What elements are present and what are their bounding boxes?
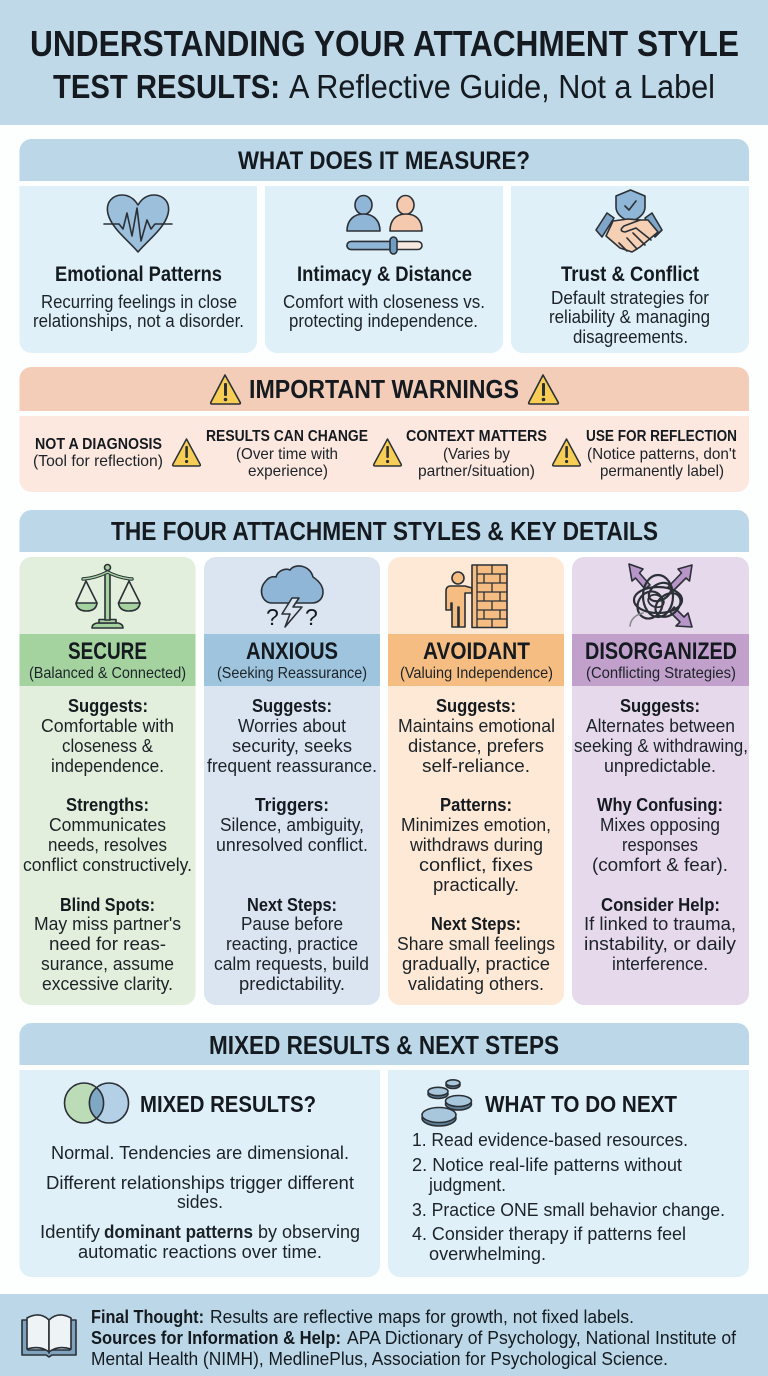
text block: anxious next steps: Pause before [241, 914, 343, 934]
icon: shield and handshake [596, 190, 662, 252]
text block: avoidant patterns: Minimizes emotion, [401, 815, 551, 835]
icon: two people with slider [347, 196, 422, 254]
text block: mixed results explanation [40, 1143, 360, 1262]
warning: context matters: CONTEXT MATTERS [406, 428, 547, 445]
text block: anxious next steps: reacting, practice [226, 934, 358, 954]
text block: anxious triggers: Triggers: [255, 795, 329, 815]
panel: anxious [204, 557, 380, 1005]
icon: open book [22, 1315, 76, 1357]
heading: what does it measure: WHAT DOES IT MEASURE? [238, 147, 530, 175]
numbered list: next steps: 4. Consider therapy if patterns feel [412, 1224, 686, 1244]
icon: venn diagram [64, 1083, 128, 1123]
text block: anxious suggests: security, seeks [232, 736, 352, 756]
text block: avoidant patterns [401, 795, 551, 895]
text block: secure strengths: Communicates [49, 815, 166, 835]
heading: the four attachment styles [20, 510, 749, 552]
text block: secure strengths: conflict constructively. [23, 855, 192, 875]
panel: intimacy and distance: Intimacy & Distance [297, 263, 472, 286]
warning: results can change: (Over time with [236, 446, 338, 463]
text block: secure suggests: independence. [51, 756, 164, 776]
numbered list: next steps: judgment. [428, 1175, 506, 1195]
band: secure: SECURE [68, 638, 147, 665]
text block: secure blind spots: May miss partner's [34, 914, 181, 934]
heading: what does it measure [20, 139, 749, 181]
warning: not a diagnosis: (Tool for reflection) [33, 453, 163, 470]
text block: disorganized why confusing: Mixes opposing [600, 815, 720, 835]
icon: warning triangle right [529, 375, 558, 404]
icon: warning triangle 2 [374, 439, 401, 466]
numbered list: next steps: 2. Notice real-life patterns without [412, 1155, 682, 1175]
text block: anxious suggests [207, 696, 377, 776]
warning: use for reflection: (Notice patterns, don't [587, 446, 737, 463]
warning: not a diagnosis: NOT A DIAGNOSIS [35, 436, 162, 453]
icon: heart with pulse [104, 195, 172, 252]
text block: final thought: Sources for Information & Help: [91, 1328, 341, 1348]
title banner [0, 0, 768, 125]
text block: avoidant suggests: Maintains emotional [398, 716, 555, 736]
text block: avoidant suggests: Suggests: [436, 696, 516, 716]
band: avoidant [388, 634, 564, 686]
heading: mixed results and next steps: MIXED RESULTS & NEXT STEPS [209, 1030, 559, 1060]
icon: warning triangle left [211, 375, 240, 404]
panel: mixed results: MIXED RESULTS? [140, 1091, 316, 1117]
band: anxious: ANXIOUS [246, 638, 338, 665]
text block: secure strengths [23, 795, 192, 875]
text block: anxious next steps: Next Steps: [247, 895, 337, 915]
text block: secure suggests: Suggests: [68, 696, 148, 716]
panel: trust and conflict: Trust & Conflict [561, 263, 699, 286]
text block: avoidant next steps: validating others. [408, 974, 544, 994]
icon label: question marks [266, 604, 318, 630]
text block: secure suggests: closeness & [62, 736, 153, 756]
text block: avoidant patterns: practically. [433, 875, 519, 895]
panel: avoidant [388, 557, 564, 1005]
warning: use for reflection: USE FOR REFLECTION [586, 428, 737, 445]
text block: disorganized suggests: Alternates between [586, 716, 735, 736]
band: secure [20, 634, 196, 686]
text block: avoidant next steps: gradually, practice [402, 954, 550, 974]
text block: final thought: APA Dictionary of Psychology, National Institute of [347, 1328, 737, 1348]
text block: secure blind spots [34, 895, 181, 994]
heading: mixed results and next steps [20, 1023, 749, 1065]
footer: final thought and sources [0, 1294, 768, 1376]
icon: tangled knot with arrows [629, 564, 692, 627]
text block: disorganized why confusing: Why Confusing: [597, 795, 723, 815]
panel: warnings list [20, 416, 749, 492]
numbered list: next steps: overwhelming. [429, 1244, 546, 1264]
text block: anxious suggests: Worries about [238, 716, 346, 736]
text block: anxious suggests: Suggests: [252, 696, 332, 716]
text block: avoidant next steps [397, 914, 555, 994]
numbered list: next steps: 3. Practice ONE small behavior change. [412, 1200, 725, 1220]
panel: intimacy and distance [265, 186, 503, 353]
warning: results can change: experience) [248, 463, 328, 480]
section: what does it measure [20, 139, 749, 353]
text block: disorganized why confusing: responses [622, 835, 698, 855]
title banner: TEST RESULTS: [53, 68, 280, 105]
text block: avoidant patterns: withdraws during [409, 835, 543, 855]
title banner: A Reflective Guide, Not a Label [289, 68, 715, 105]
text block: disorganized suggests [574, 696, 748, 776]
band: disorganized: (Conflicting Strategies) [586, 665, 736, 682]
panel: intimacy and distance: Comfort with closeness vs. [283, 292, 485, 312]
text block: avoidant suggests: distance, prefers [408, 736, 544, 756]
panel: emotional patterns: relationships, not a disorder. [33, 311, 244, 331]
warning: results can change: RESULTS CAN CHANGE [206, 428, 368, 445]
text block: secure strengths: Strengths: [66, 795, 149, 815]
text block: secure blind spots: surance, assume [41, 954, 174, 974]
text block: secure blind spots: excessive clarity. [42, 974, 173, 994]
panel: trust and conflict: disagreements. [573, 327, 688, 347]
text block: mixed results explanation: by observing [258, 1222, 360, 1242]
warning: not a diagnosis [33, 436, 163, 470]
icon: warning triangle 3 [553, 439, 580, 466]
text block: secure strengths: needs, resolves [48, 835, 167, 855]
text block: disorganized suggests: seeking & withdrawing, [574, 736, 748, 756]
text block: secure blind spots: Blind Spots: [60, 895, 155, 915]
text block: anxious triggers [216, 795, 368, 855]
warning: context matters: partner/situation) [418, 463, 535, 480]
text block: mixed results explanation: sides. [177, 1192, 223, 1212]
band: disorganized [572, 634, 749, 686]
text block: disorganized suggests: unpredictable. [604, 756, 716, 776]
text block: anxious suggests: frequent reassurance. [207, 756, 377, 776]
panel: mixed results [20, 1070, 380, 1277]
panel: trust and conflict [511, 186, 749, 353]
warning: use for reflection: permanently label) [600, 463, 724, 480]
heading: the four attachment styles: THE FOUR ATTACHMENT STYLES & KEY DETAILS [111, 516, 658, 546]
text block: disorganized consider help [584, 895, 736, 974]
panel: trust and conflict: reliability & managing [549, 307, 710, 327]
band: anxious: (Seeking Reassurance) [217, 665, 367, 682]
text block: final thought: Results are reflective maps for growth, not fixed labels. [210, 1307, 634, 1327]
band: avoidant: AVOIDANT [423, 638, 530, 665]
numbered list: next steps [412, 1130, 725, 1264]
text block: avoidant suggests: self-reliance. [422, 756, 530, 776]
text block: avoidant suggests [398, 696, 555, 776]
text block: disorganized why confusing: (comfort & fear). [592, 855, 728, 875]
text block: disorganized consider help: interference. [612, 954, 708, 974]
text block: secure blind spots: need for reas- [49, 934, 166, 954]
text block: mixed results explanation: Identify [40, 1222, 100, 1242]
text block: mixed results explanation: automatic reactions over time. [78, 1242, 322, 1262]
text block: secure suggests: Comfortable with [41, 716, 174, 736]
icon label: question marks: ? [266, 604, 279, 630]
band: avoidant: (Valuing Independence) [400, 665, 553, 682]
section: important warnings [20, 367, 749, 492]
text block: disorganized consider help: instability, or daily [584, 934, 736, 954]
text block: anxious next steps [214, 895, 369, 994]
band: disorganized: DISORGANIZED [585, 638, 737, 665]
text block: disorganized consider help: Consider Help: [601, 895, 720, 915]
text block: anxious next steps: predictability. [239, 974, 345, 994]
text block: avoidant next steps: Share small feelings [397, 934, 555, 954]
panel: secure [20, 557, 196, 1005]
icon label: question marks: ? [305, 604, 318, 630]
text block: disorganized suggests: Suggests: [620, 696, 700, 716]
text block: final thought [91, 1307, 737, 1369]
warning: use for reflection [586, 428, 737, 480]
text block: mixed results explanation: dominant patterns [104, 1222, 253, 1242]
text block: mixed results explanation: Normal. Tendencies are dimensional. [51, 1143, 349, 1163]
band: secure: (Balanced & Connected) [29, 665, 186, 682]
text block: avoidant next steps: Next Steps: [431, 914, 521, 934]
panel: what to do next [388, 1070, 749, 1277]
band: anxious [204, 634, 380, 686]
icon: warning triangle 1 [173, 439, 200, 466]
text block: mixed results explanation: Different relationships trigger different [46, 1173, 354, 1193]
icon: storm cloud [261, 566, 323, 627]
panel: emotional patterns: Emotional Patterns [55, 263, 222, 286]
panel: emotional patterns [20, 186, 257, 353]
panel: trust and conflict: Default strategies for [551, 288, 709, 308]
warning: results can change [206, 428, 368, 480]
numbered list: next steps: 1. Read evidence-based resources. [412, 1130, 688, 1150]
warning: context matters [406, 428, 547, 480]
text block: final thought: Final Thought: [91, 1307, 204, 1327]
heading: important warnings: IMPORTANT WARNINGS [249, 374, 519, 404]
warning: context matters: (Varies by [443, 446, 510, 463]
text block: final thought: Mental Health (NIMH), MedlinePlus, Association for Psychological Science. [91, 1349, 668, 1369]
icon: stepping stones [422, 1080, 472, 1126]
icon: person at brick wall [446, 565, 507, 628]
text block: anxious next steps: calm requests, build [214, 954, 369, 974]
heading: important warnings [20, 367, 749, 411]
panel: emotional patterns: Recurring feelings in close [41, 292, 237, 312]
text block: anxious triggers: unresolved conflict. [216, 835, 368, 855]
panel: intimacy and distance: protecting independence. [289, 311, 478, 331]
text block: disorganized consider help: If linked to trauma, [584, 914, 736, 934]
panel: what to do next: WHAT TO DO NEXT [485, 1091, 677, 1117]
text block: avoidant patterns: conflict, fixes [419, 855, 533, 875]
panel: disorganized [572, 557, 749, 1005]
icon: balance scales [76, 564, 140, 628]
text block: anxious triggers: Silence, ambiguity, [220, 815, 364, 835]
text block: avoidant patterns: Patterns: [440, 795, 512, 815]
text block: disorganized why confusing [592, 795, 728, 875]
text block: secure suggests [41, 696, 174, 776]
